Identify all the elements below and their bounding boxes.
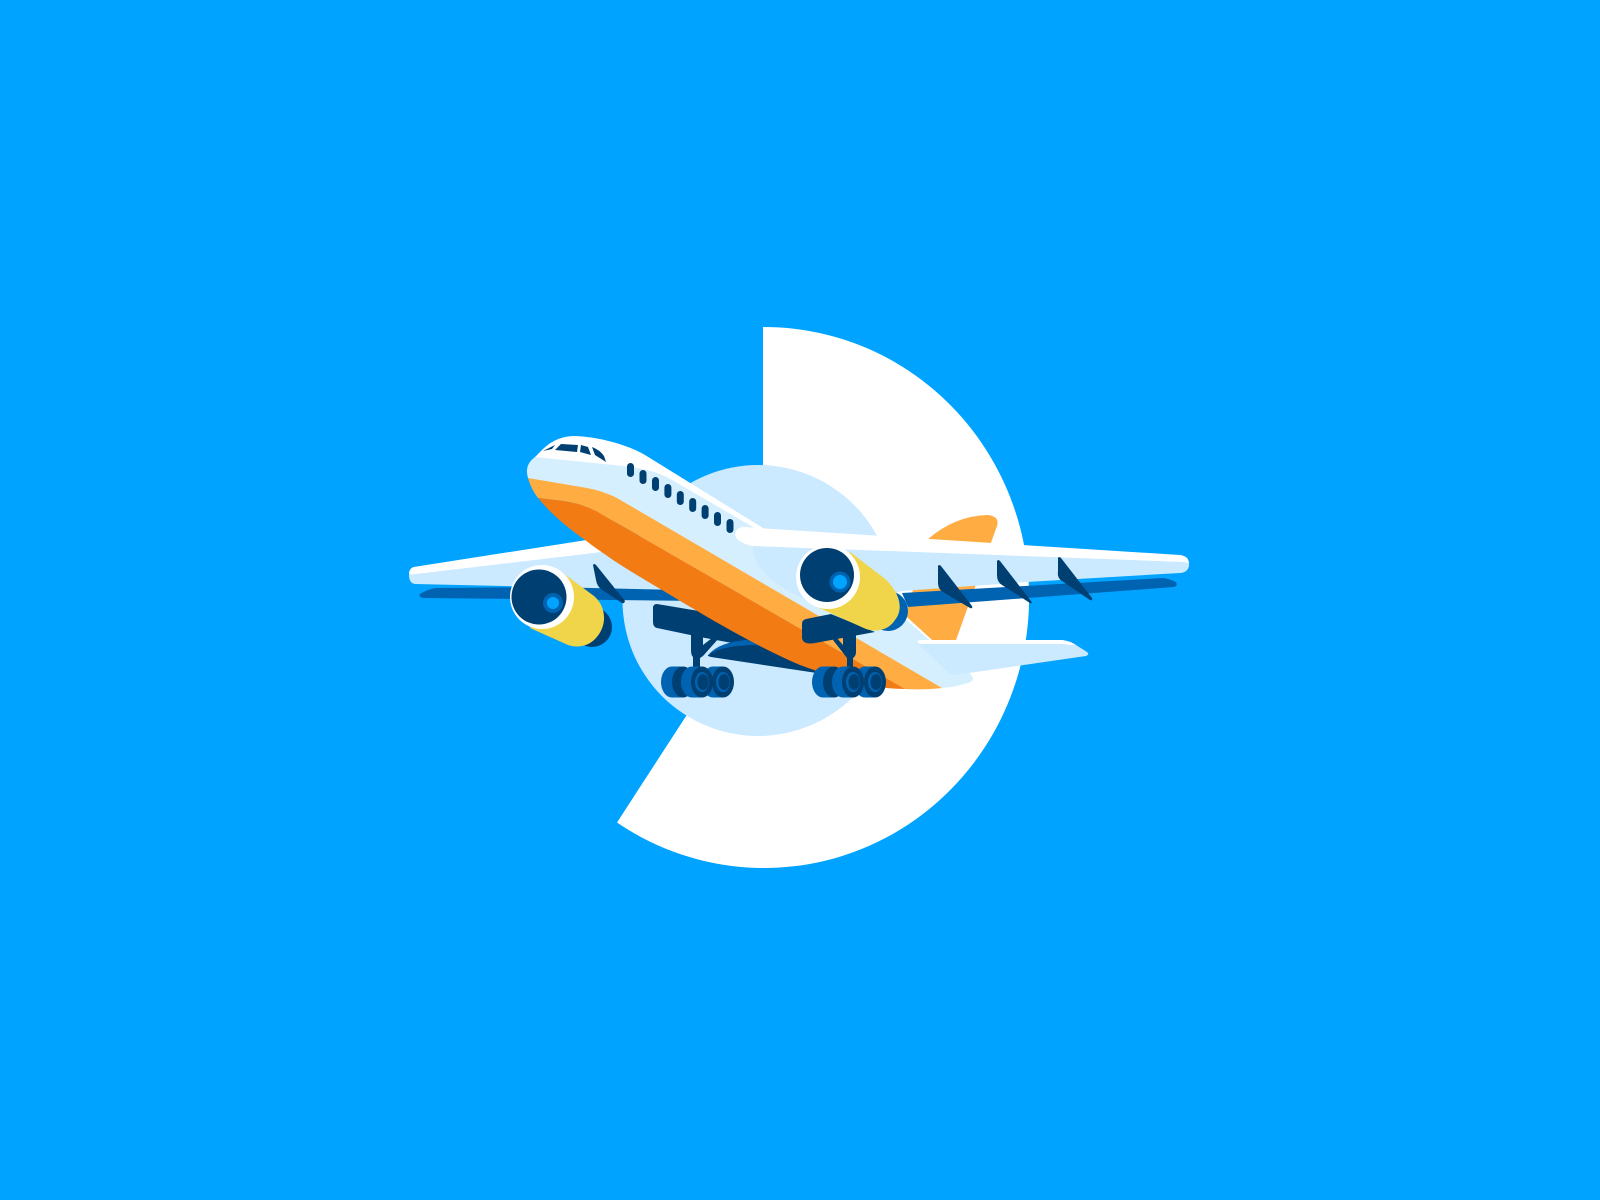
tail fin [905,515,998,640]
far engine [510,565,612,647]
far wing [409,540,680,590]
near landing gear wheels [812,666,886,698]
far horizontal stabilizer [708,640,830,675]
white circular sector [617,327,1029,868]
far landing gear strut and pod [653,604,770,668]
near wing [735,527,1189,612]
pale blue circle [622,465,894,736]
far wing flap fairing [593,564,625,603]
near engine shadow [868,591,908,631]
passenger windows [627,463,734,533]
far wing shadow [419,586,700,601]
fuselage white top [535,436,968,672]
horizontal stabilizer [917,640,1088,675]
near engine [796,545,900,630]
near wing flap fairings [938,557,1092,608]
fuselage [527,436,973,689]
fuselage light belly [527,457,973,688]
far landing gear wheels [661,666,734,698]
cockpit windows [543,444,606,462]
fuselage orange stripe [528,478,942,689]
near wing shadow [902,578,1177,607]
near landing gear pod [802,614,875,668]
fuselage dark orange underside [538,498,905,689]
